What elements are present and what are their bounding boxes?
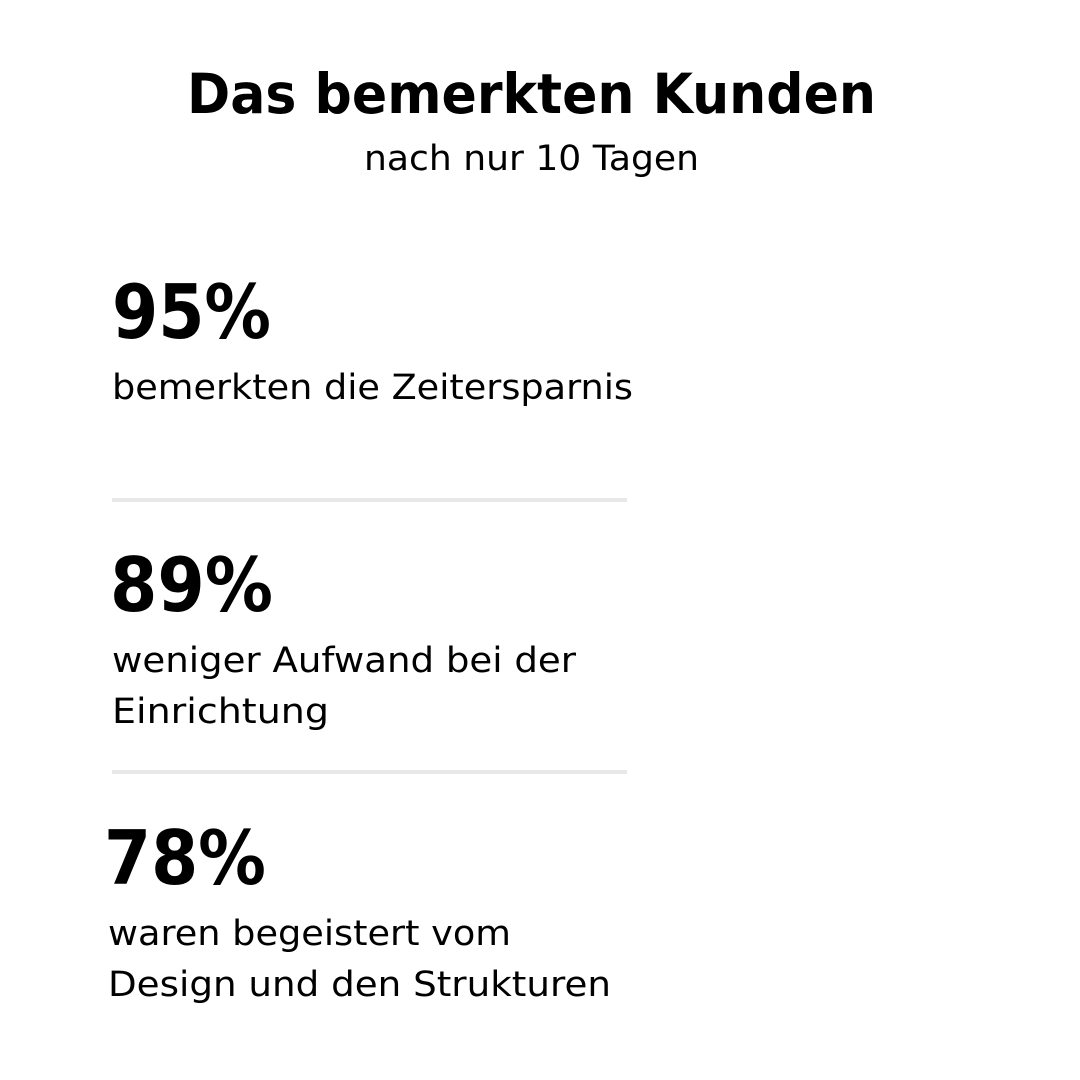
description: design and structures: waren begeistert vom: [108, 914, 511, 954]
number: 95%: 95%: [112, 268, 271, 356]
number: 78%: 78%: [104, 814, 266, 902]
title: Das bemerkten Kunden: [187, 62, 876, 126]
panel: statistic 89%: [110, 541, 577, 732]
description: less setup effort: weniger Aufwand bei der: [112, 641, 577, 681]
description: design and structures: Design und den Strukturen: [108, 965, 611, 1005]
description: design and structures: [108, 914, 611, 1005]
subtitle: nach nur 10 Tagen: [364, 139, 699, 179]
panel: statistic 95%: [112, 268, 633, 408]
description: time savings: bemerkten die Zeitersparnis: [112, 368, 633, 408]
description: less setup effort: [112, 641, 577, 732]
description: less setup effort: Einrichtung: [112, 692, 329, 732]
panel: statistic 78%: [104, 814, 611, 1005]
number: 89%: 89%: [110, 541, 273, 629]
